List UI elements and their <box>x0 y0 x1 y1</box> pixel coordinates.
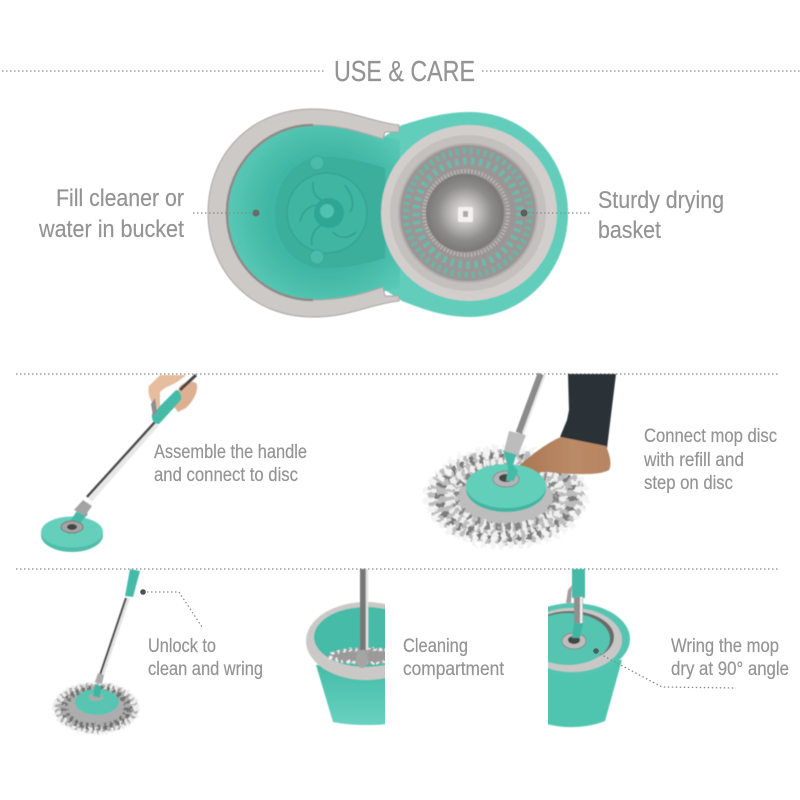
divider upper <box>16 373 778 375</box>
bucket floor with spinner <box>275 156 385 268</box>
gray left rim <box>208 109 399 317</box>
teal basket-side lobe <box>385 112 568 317</box>
wringing bucket illustration <box>548 568 631 728</box>
step 1 text: Assemble the handle <box>154 442 307 463</box>
bucket interior <box>227 125 400 300</box>
rim inner shadow <box>227 125 313 300</box>
divider lower <box>16 568 778 570</box>
step 2 text: Connect mop disc <box>644 426 777 447</box>
step 2 text <box>643 426 777 494</box>
cleaning text: Cleaning <box>403 636 468 657</box>
cleaning text: compartment <box>403 659 505 680</box>
leader: wring <box>593 648 736 688</box>
leader: fill cleaner <box>193 210 260 216</box>
wring text <box>671 636 789 680</box>
step 2 text: step on disc <box>644 473 733 494</box>
step 2 text: with refill and <box>643 450 744 471</box>
step 2: foot on mop disc illustration <box>427 374 616 545</box>
foot <box>516 437 610 475</box>
step 3: unlock mop illustration <box>54 569 140 733</box>
cleaning bucket illustration <box>306 568 385 726</box>
leader: unlock <box>140 589 202 627</box>
label: drying basket: Sturdy drying <box>598 187 724 214</box>
jeans <box>560 374 616 448</box>
bucket top view <box>208 109 568 317</box>
disc <box>466 466 546 512</box>
label: fill cleaner: Fill cleaner or <box>56 185 184 212</box>
step 1 text <box>154 442 307 486</box>
leader: drying basket <box>520 210 590 216</box>
title: USE & CARE <box>334 56 475 88</box>
label: drying basket: basket <box>598 217 661 244</box>
label: drying basket <box>598 187 724 244</box>
step 3 text: Unlock to <box>148 636 216 657</box>
wring text: Wring the mop <box>671 636 779 657</box>
label: fill cleaner <box>38 185 184 243</box>
drying basket <box>381 125 557 301</box>
step 1: assemble handle illustration <box>41 375 197 552</box>
cleaning text <box>403 636 505 680</box>
pole <box>519 374 541 433</box>
label: fill cleaner: water in bucket <box>38 216 184 243</box>
step 3 text <box>148 636 263 680</box>
mop refill <box>427 449 585 545</box>
step 1 text: and connect to disc <box>154 465 298 486</box>
step 3 text: clean and wring <box>148 659 263 680</box>
